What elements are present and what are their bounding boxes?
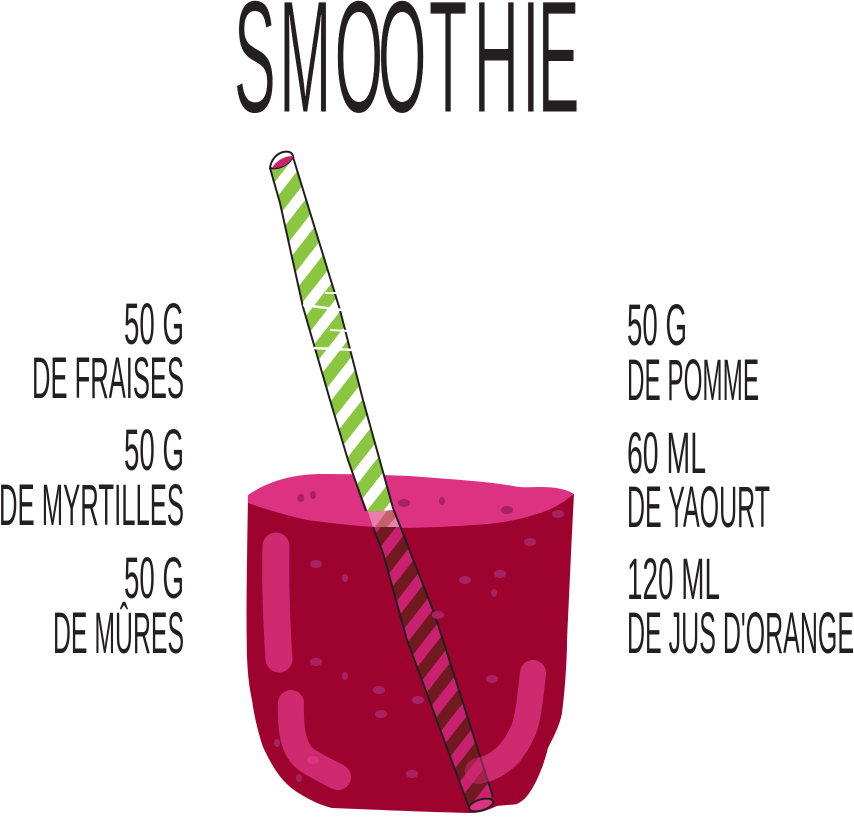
label: 50 g de mures [53,546,184,666]
label: 50 g de pomme: 50 G [627,293,687,358]
label: 50 g de myrtilles [0,418,184,538]
fruit pulp dots [274,491,564,782]
text: 50 G [124,292,184,357]
text: DE MYRTILLES [0,473,184,538]
highlight: bottom right [478,673,533,771]
straw: submerged part [373,527,493,810]
highlight: bottom left [291,703,338,777]
label: 60 ml de yaourt: 60 ML [627,421,706,486]
straw: outlines [270,157,493,810]
straw: refraction stripe [375,510,397,527]
straw: green part above surface [270,157,393,512]
straw: bottom opening [467,796,495,814]
label: 120 ml de jus d'orange: 120 ML [627,547,720,612]
label: 50 g de fraises [32,292,184,411]
straw: white cuts [303,293,354,350]
label: 120 ml de jus d'orange [627,547,854,666]
text: DE FRAISES [32,346,184,411]
label: 60 ml de yaourt [627,421,770,540]
ingredients: right column [627,293,854,666]
highlight overlap on straw [478,754,510,771]
label: 50 g de pomme [627,293,759,413]
ingredients: left column [0,292,184,666]
straw: top opening [270,152,293,168]
glass of smoothie [247,474,574,813]
text: 50 G [124,418,184,483]
highlight: left [276,546,279,659]
text: 50 G [124,546,184,611]
straw [270,152,495,814]
glass body [247,494,574,813]
text: DE MÛRES [53,601,184,666]
straw: refraction at surface [368,510,400,527]
smoothie surface [248,474,574,528]
